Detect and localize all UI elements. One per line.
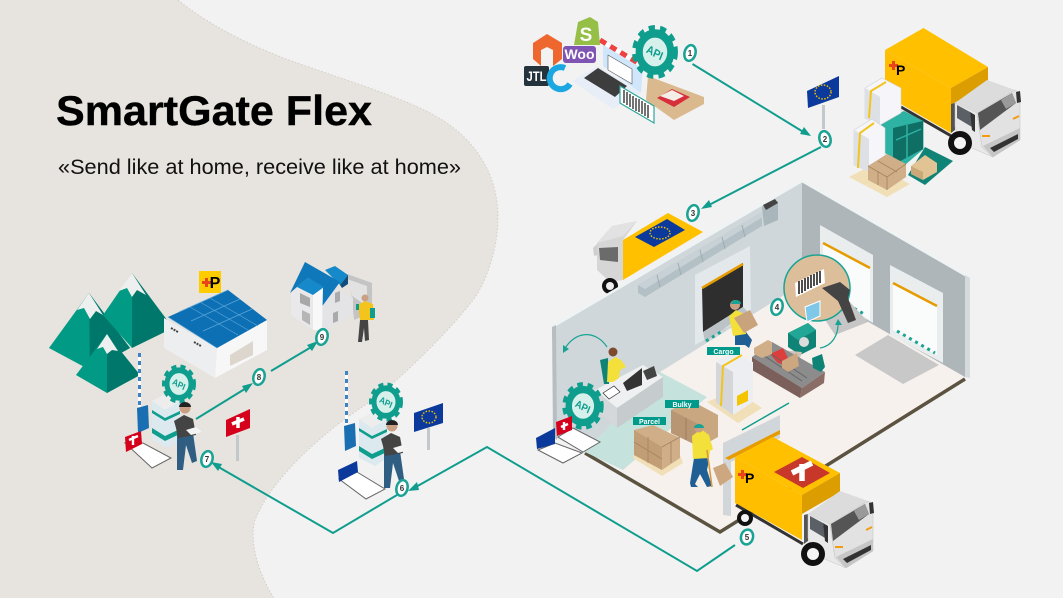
node 2 <box>818 130 832 148</box>
floor edge <box>585 379 965 532</box>
API gear: shop <box>635 28 675 76</box>
Swiss sign <box>226 409 250 461</box>
customs documents and flags <box>536 416 600 463</box>
customs terminal <box>359 411 387 466</box>
node 3: 3 <box>691 209 696 218</box>
barrier <box>344 371 356 451</box>
label: bulky <box>665 400 699 409</box>
Swiss warehouse <box>164 271 267 378</box>
logo: Swiss Post: P <box>210 275 221 292</box>
barcode scanner callout <box>784 255 856 323</box>
white cargo unit front <box>854 119 885 173</box>
customs officer <box>381 420 409 488</box>
customs terminal <box>152 393 180 448</box>
right wall <box>802 182 965 377</box>
parcel cartons on pallet <box>633 425 683 476</box>
mountains <box>49 273 173 393</box>
reception desk <box>595 365 663 428</box>
panel: online shop <box>524 17 704 123</box>
curved arrow head <box>563 345 569 353</box>
logo: JTL <box>524 66 549 86</box>
API gear: warehouse <box>565 385 601 427</box>
node 9: 9 <box>320 333 325 342</box>
receptionist <box>600 348 626 384</box>
node 1: 1 <box>688 49 693 58</box>
scanner arrow <box>820 321 838 348</box>
subtitle: «Send like at home, receive like at home» <box>58 156 461 179</box>
truck cab <box>948 80 1021 157</box>
palletised goods <box>849 78 953 197</box>
scanner arrow head <box>835 319 842 325</box>
logo: Shopify: S <box>580 25 592 46</box>
logo: truck P: P <box>896 62 905 78</box>
arrowhead to 8 <box>242 383 253 393</box>
label: parcel: Parcel <box>639 419 660 426</box>
ventilation duct <box>638 199 778 297</box>
node 6: 6 <box>400 484 405 493</box>
arrowhead to 9 <box>307 341 318 351</box>
curved arrow <box>564 335 607 350</box>
title: SmartGate Flex <box>56 87 373 134</box>
Swiss customs gate <box>125 353 202 470</box>
logo: WooCommerce: Woo <box>564 46 594 62</box>
background beige region <box>0 0 498 598</box>
API gear: warehouse: API <box>573 398 592 417</box>
customs officer <box>174 402 202 470</box>
cartons <box>868 154 906 190</box>
house <box>290 262 372 332</box>
node 9 <box>315 328 329 346</box>
flow line: 1 to 2 <box>692 64 805 133</box>
node 7: 7 <box>205 455 210 464</box>
arrowhead to 2 <box>800 127 811 136</box>
flow line: 6 to 7 <box>215 465 397 533</box>
worker with box <box>729 300 758 348</box>
flow line: 7 to 8 <box>196 387 248 419</box>
label: bulky: Bulky <box>672 402 692 409</box>
API gear: shop: API <box>644 43 664 64</box>
logo: Magento <box>533 34 562 66</box>
bulky cartons <box>671 400 718 447</box>
arrowhead to 7 <box>211 462 222 471</box>
white cargo unit rear <box>865 78 901 125</box>
dock door 2: right wall <box>890 265 943 363</box>
panel: warehouse <box>536 181 970 532</box>
EU flag and documents <box>338 461 385 499</box>
truck: collection <box>885 28 1021 157</box>
recipient person <box>356 294 375 342</box>
small carton <box>911 155 937 180</box>
loading pad <box>855 335 939 384</box>
label: parcel <box>633 417 666 426</box>
truck: Swiss delivery <box>735 437 874 568</box>
barrier <box>137 353 149 433</box>
teal floor zone <box>585 372 707 470</box>
teal cabinet <box>880 111 924 165</box>
storefront <box>600 40 643 93</box>
node 4 <box>770 298 784 316</box>
node 7 <box>200 450 214 468</box>
conveyor <box>752 340 825 398</box>
arrowhead to 3 <box>701 200 712 209</box>
node 1 <box>683 44 697 62</box>
API gear: EU customs: API <box>378 394 394 410</box>
cargo unit on pallet <box>707 353 762 423</box>
laptop <box>572 66 641 109</box>
flow line: 2 to 3 <box>707 147 821 206</box>
scanning machine <box>780 301 820 358</box>
logo: JTL: JTL <box>526 68 547 84</box>
node 5 <box>739 528 755 546</box>
dock frame: front <box>723 403 789 516</box>
flow line: 5 to 6 <box>414 447 735 571</box>
logo: truck P: P <box>745 470 754 486</box>
dock door 1: right wall <box>812 225 873 335</box>
API gear: Swiss customs: API <box>171 376 187 392</box>
pallet <box>849 165 910 197</box>
parcel box <box>646 76 704 120</box>
EU truck behind warehouse <box>593 213 703 294</box>
Swiss flag and documents <box>125 431 171 468</box>
arrowhead to 6 <box>408 482 419 491</box>
node 6 <box>395 479 409 497</box>
dock door: cargo side <box>695 246 751 345</box>
left wall <box>552 182 802 452</box>
warehouse floor <box>556 284 965 530</box>
EU sign <box>807 76 839 129</box>
truck cab <box>801 491 874 568</box>
EU sign: customs <box>414 403 443 450</box>
node 5: 5 <box>745 533 750 542</box>
teal tray <box>908 147 953 185</box>
logo: Shopify <box>574 17 600 46</box>
EU customs gate <box>338 371 409 499</box>
label: cargo <box>707 347 740 356</box>
node 2: 2 <box>823 135 828 144</box>
node 3 <box>686 204 700 222</box>
logo: blue arc <box>550 67 570 89</box>
node 8: 8 <box>257 373 262 382</box>
flow line: 8 to 9 <box>271 346 313 371</box>
label: cargo: Cargo <box>713 349 734 356</box>
worker with trolley <box>690 424 733 487</box>
node 4: 4 <box>775 303 780 312</box>
node 8 <box>252 368 266 386</box>
shipping label barcode <box>620 86 654 123</box>
